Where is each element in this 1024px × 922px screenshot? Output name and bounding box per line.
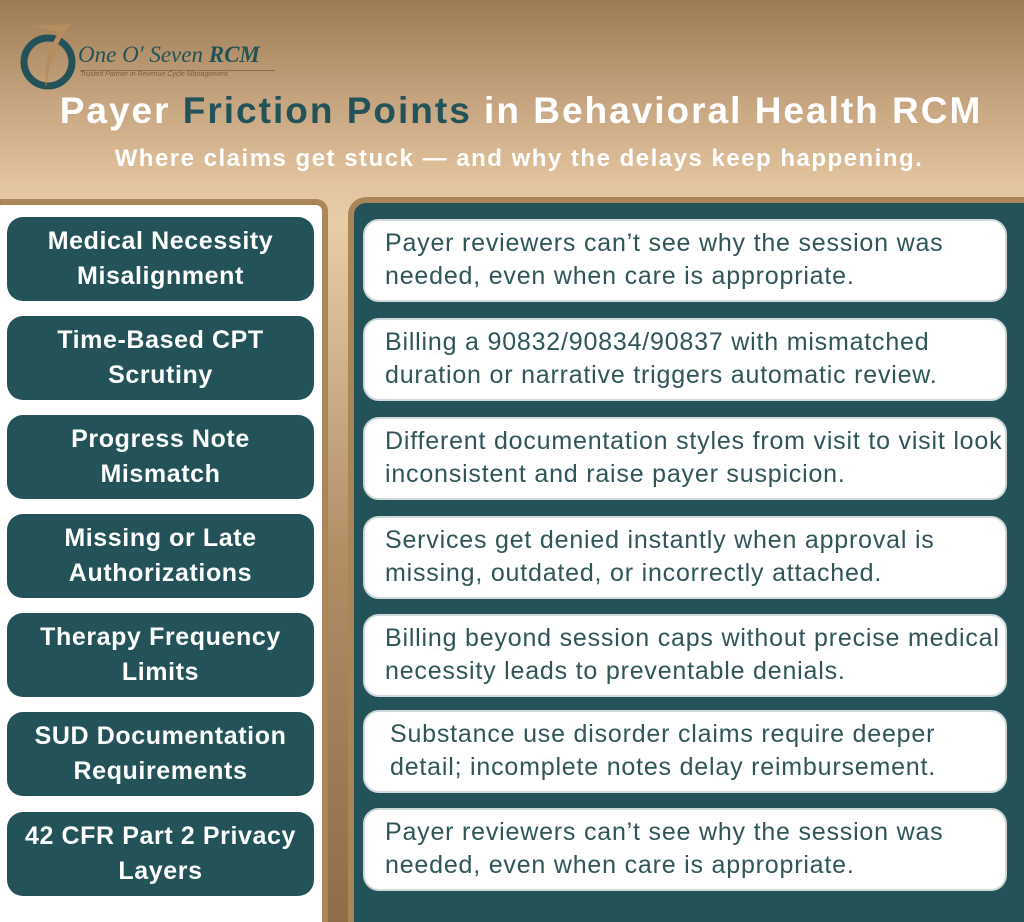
pill: medical necessity: Medical Necessity	[48, 227, 273, 255]
box: authorizations: Services get denied instantly when approval is	[385, 526, 935, 554]
pill: authorizations: Authorizations	[69, 559, 252, 587]
pill: 42 cfr	[7, 812, 314, 896]
box: medical necessity	[363, 219, 1007, 302]
logo	[20, 24, 275, 90]
subtitle: Where claims get stuck — and why the delays keep happening.	[115, 145, 923, 172]
box: time-based cpt	[363, 318, 1007, 401]
pill: time-based cpt: Time-Based CPT	[57, 326, 264, 354]
box: medical necessity: Payer reviewers can’t see why the session was	[385, 229, 943, 257]
pill: sud: SUD Documentation	[35, 722, 286, 750]
pill: medical necessity	[7, 217, 314, 301]
pill: sud: Requirements	[74, 757, 247, 785]
title: Payer Friction Points in Behavioral Health RCM	[60, 90, 982, 131]
panel: left categories	[0, 199, 328, 922]
box: time-based cpt: duration or narrative triggers automatic review.	[385, 361, 938, 389]
pill: progress note: Mismatch	[100, 460, 221, 488]
pill: progress note	[7, 415, 314, 499]
box: 42 cfr	[363, 808, 1007, 891]
box: authorizations	[363, 516, 1007, 599]
pill: progress note: Progress Note	[71, 425, 250, 453]
pill: time-based cpt	[7, 316, 314, 400]
box: 42 cfr: needed, even when care is appropriate.	[385, 851, 855, 879]
box: authorizations: missing, outdated, or incorrectly attached.	[385, 559, 882, 587]
box: medical necessity: needed, even when care is appropriate.	[385, 262, 855, 290]
box: sud: detail; incomplete notes delay reimbursement.	[390, 753, 936, 781]
pill: therapy frequency	[7, 613, 314, 697]
pill: authorizations	[7, 514, 314, 598]
icon: logo swoosh	[20, 24, 76, 90]
box: progress note: inconsistent and raise payer suspicion.	[385, 460, 846, 488]
box: sud: Substance use disorder claims require deeper	[390, 720, 935, 748]
pill: time-based cpt: Scrutiny	[108, 361, 213, 389]
box: therapy frequency	[363, 614, 1007, 697]
box: progress note: Different documentation styles from visit to visit look	[385, 427, 1002, 455]
pill: therapy frequency: Therapy Frequency	[40, 623, 281, 651]
box: 42 cfr: Payer reviewers can’t see why the session was	[385, 818, 943, 846]
panel: right descriptions	[348, 197, 1024, 922]
logo: Trusted Partner in Revenue Cycle Management	[80, 71, 228, 78]
pill: 42 cfr: 42 CFR Part 2 Privacy	[25, 822, 296, 850]
box: progress note	[363, 417, 1007, 500]
pill: therapy frequency: Limits	[122, 658, 199, 686]
box: time-based cpt: Billing a 90832/90834/90837 with mismatched	[385, 328, 929, 356]
pill: medical necessity: Misalignment	[77, 262, 244, 290]
pill: 42 cfr: Layers	[118, 857, 203, 885]
pill: sud	[7, 712, 314, 796]
pill: authorizations: Missing or Late	[64, 524, 257, 552]
box: therapy frequency: necessity leads to preventable denials.	[385, 657, 846, 685]
logo: One O' Seven RCM	[78, 42, 260, 67]
box: sud	[363, 710, 1007, 793]
box: therapy frequency: Billing beyond session caps without precise medical	[385, 624, 1000, 652]
